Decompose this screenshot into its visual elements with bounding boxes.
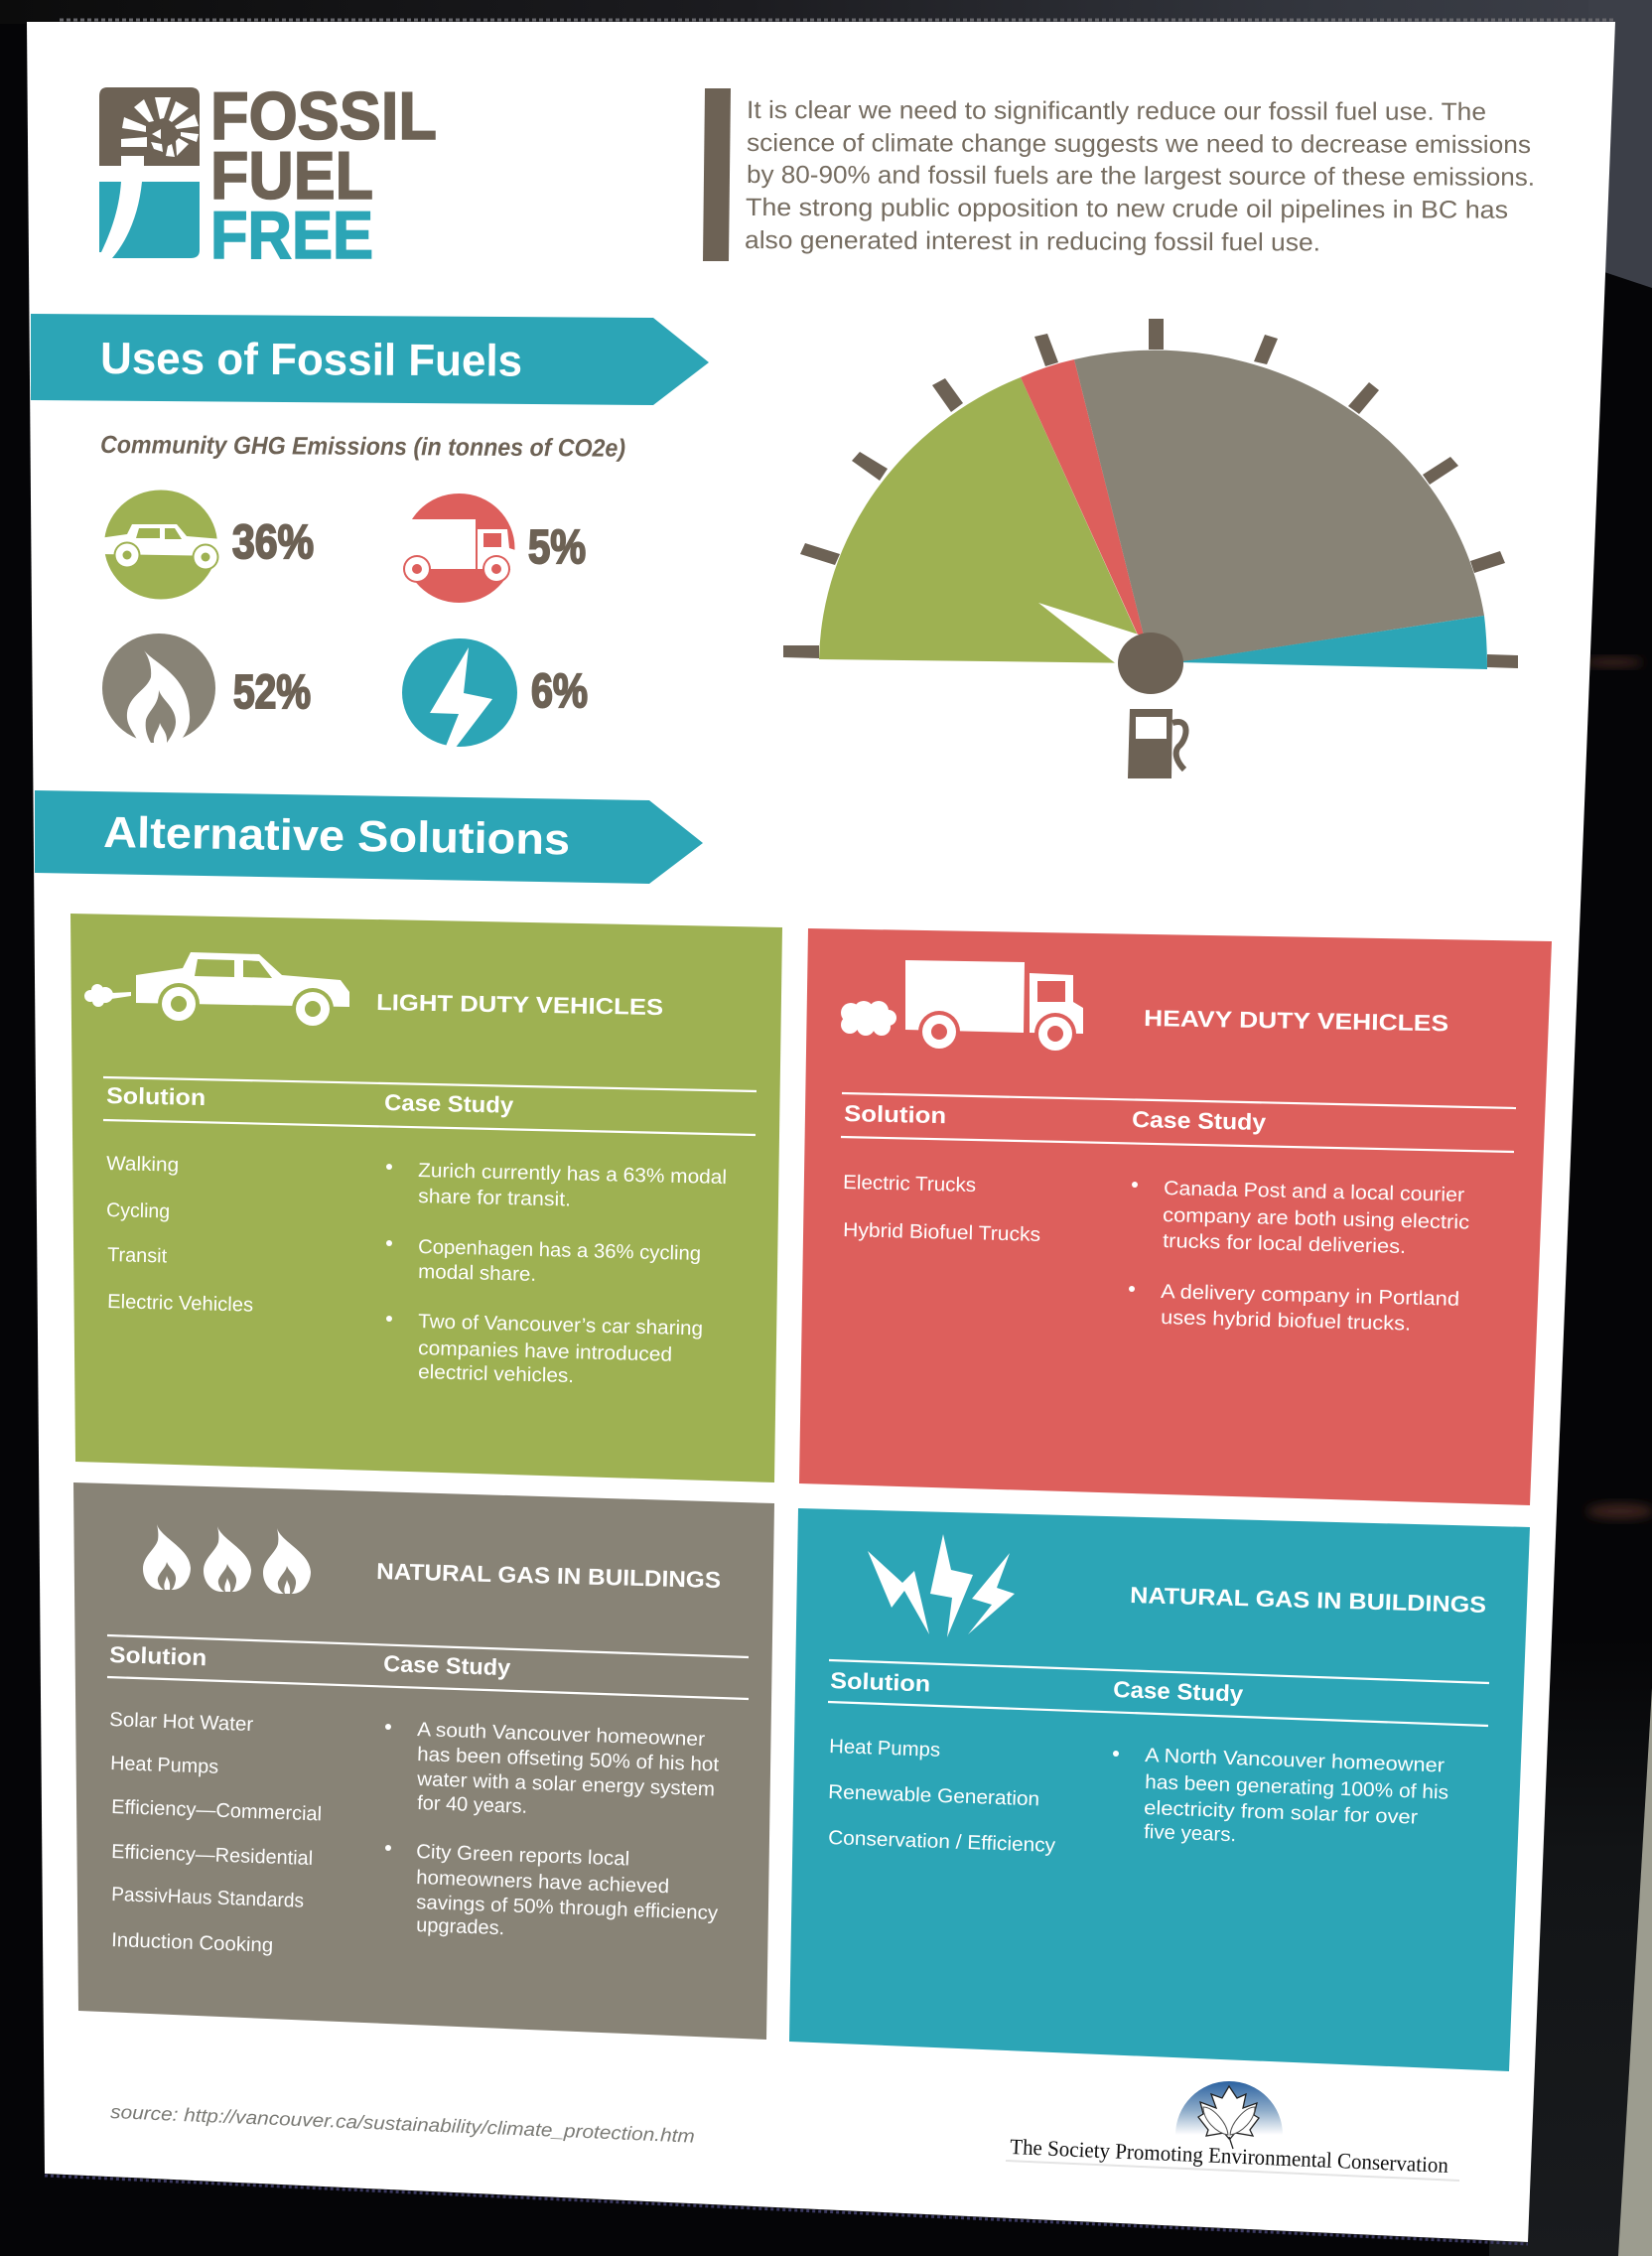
solutions list: Solar Hot Water [109, 1709, 254, 1736]
column head: Solution: Solution [106, 1082, 206, 1110]
value: 5%: 5% [528, 521, 586, 574]
panel background [73, 1482, 774, 2040]
solutions list: Renewable Generation [828, 1781, 1039, 1810]
case studies list [1113, 1745, 1448, 1846]
panel: light duty vehicles [70, 914, 782, 1482]
case studies list: electricl vehicles. [418, 1361, 574, 1387]
logo word: FOSSIL: FOSSIL [210, 78, 437, 154]
column head: Solution: Solution [830, 1667, 931, 1697]
icon: fuel pump [1128, 709, 1186, 778]
intro paragraph: also generated interest in reducing fossil fuel use. [745, 226, 1320, 257]
case studies list: A North Vancouver homeowner [1145, 1745, 1446, 1777]
gauge chart [783, 319, 1518, 778]
value: 6%: 6% [531, 665, 588, 718]
column head: Case Study: Case Study [1113, 1676, 1244, 1707]
gauge hub [1118, 633, 1183, 694]
case studies list: Copenhagen has a 36% cycling [418, 1236, 701, 1265]
solutions list: Hybrid Biofuel Trucks [843, 1219, 1040, 1246]
case studies list: for 40 years. [417, 1792, 528, 1818]
icon: three flames [143, 1524, 311, 1594]
icon: three lightning bolts [868, 1534, 1015, 1637]
case studies list: trucks for local deliveries. [1163, 1230, 1406, 1258]
banner: Alternative Solutions: Alternative Solutions [103, 808, 571, 864]
case studies list: City Green reports local [416, 1841, 629, 1871]
stat: light duty vehicles 36% [99, 491, 314, 600]
logo word: FREE: FREE [210, 198, 373, 273]
value: 36%: 36% [232, 516, 314, 569]
solutions list: Electric Trucks [843, 1172, 976, 1197]
logo: Society Promoting Environmental Conservation [1006, 2081, 1459, 2181]
chart subtitle: Community GHG Emissions (in tonnes of CO2e) [100, 431, 625, 463]
case studies list [386, 1160, 727, 1387]
case studies list: uses hybrid biofuel trucks. [1161, 1307, 1411, 1336]
panel: heavy duty vehicles [799, 928, 1552, 1505]
column head: Case Study: Case Study [1132, 1106, 1267, 1135]
logo icon: turbine and road [99, 87, 200, 258]
stat: heavy duty vehicles 5% [397, 494, 586, 603]
intro accent bar [703, 88, 731, 261]
intro paragraph: The strong public opposition to new crude oil pipelines in BC has [746, 194, 1508, 224]
solutions list [843, 1172, 1040, 1246]
solutions list: Heat Pumps [110, 1753, 219, 1778]
case studies list: modal share. [418, 1261, 536, 1286]
panel title: NATURAL GAS IN BUILDINGS [376, 1558, 721, 1593]
logo word: FUEL: FUEL [210, 138, 373, 213]
panel: electricity in buildings [789, 1508, 1530, 2071]
case studies list [385, 1719, 720, 1939]
solutions list: Conservation / Efficiency [828, 1827, 1055, 1857]
panel: natural gas in buildings [73, 1482, 774, 2040]
solutions list [106, 1153, 253, 1317]
case studies list: five years. [1144, 1821, 1237, 1846]
panel title: LIGHT DUTY VEHICLES [376, 989, 663, 1020]
solutions list: Heat Pumps [829, 1736, 941, 1762]
panel background [789, 1508, 1530, 2071]
solutions list [109, 1709, 322, 1957]
intro paragraph: It is clear we need to significantly reduce our fossil fuel use. The [747, 96, 1486, 126]
icon: truck with exhaust [841, 960, 1083, 1055]
case studies list: has been generating 100% of his [1145, 1771, 1448, 1804]
source note: source: http://vancouver.ca/sustainability/climate_protection.htm [110, 2102, 695, 2148]
solutions list: Induction Cooking [111, 1929, 273, 1957]
panel background [70, 914, 782, 1482]
solutions list: Electric Vehicles [107, 1291, 253, 1317]
solutions list: Efficiency—Commercial [111, 1796, 322, 1825]
solutions list: Walking [106, 1153, 179, 1177]
society name: The Society Promoting Environmental Conservation [1010, 2134, 1448, 2178]
intro paragraph [745, 96, 1535, 257]
case studies list: A delivery company in Portland [1161, 1281, 1459, 1311]
icon: car with exhaust [84, 952, 349, 1030]
case studies list: upgrades. [416, 1914, 505, 1939]
banner: Alternative Solutions [35, 790, 703, 884]
column head: Case Study: Case Study [384, 1089, 514, 1118]
intro paragraph: science of climate change suggests we need to decrease emissions [747, 129, 1531, 159]
case studies list: share for transit. [418, 1186, 571, 1210]
stat: natural gas 52% [102, 634, 311, 743]
case studies list: Zurich currently has a 63% modal [418, 1160, 727, 1189]
panel background [799, 928, 1552, 1505]
panel title: HEAVY DUTY VEHICLES [1144, 1005, 1448, 1036]
solutions list: PassivHaus Standards [111, 1884, 304, 1912]
icon: maple leaf on dome [1175, 2081, 1283, 2149]
case studies list: savings of 50% through efficiency [416, 1892, 718, 1924]
intro paragraph: by 80-90% and fossil fuels are the largest source of these emissions. [747, 161, 1535, 192]
gauge sector: electricity 6% [1176, 616, 1487, 669]
banner: Uses of Fossil Fuels: Uses of Fossil Fuels [100, 333, 522, 386]
solutions list: Efficiency—Residential [111, 1841, 313, 1870]
stat: electricity 6% [402, 638, 588, 749]
logo: Fossil Fuel Free [99, 78, 437, 273]
gauge sector: light duty 36% [819, 377, 1151, 663]
case studies list [1129, 1178, 1469, 1336]
value: 52%: 52% [233, 666, 311, 719]
solutions list [828, 1736, 1055, 1857]
case studies list: companies have introduced [418, 1338, 672, 1366]
panel title: NATURAL GAS IN BUILDINGS [1130, 1582, 1486, 1618]
icon: truck [397, 494, 518, 603]
case studies list: Two of Vancouver’s car sharing [418, 1311, 703, 1340]
solutions list: Cycling [106, 1199, 170, 1222]
icon: car [99, 491, 222, 600]
icon: flame [102, 634, 215, 743]
icon: lightning bolt [402, 638, 517, 749]
case studies list: Canada Post and a local courier [1164, 1178, 1465, 1206]
column head: Solution: Solution [844, 1100, 946, 1128]
case studies list: company are both using electric [1163, 1204, 1469, 1234]
column head: Solution: Solution [109, 1641, 207, 1670]
case studies list: electricity from solar for over [1144, 1797, 1419, 1829]
case studies list: has been offseting 50% of his hot [417, 1744, 720, 1776]
banner: Uses of Fossil Fuels [31, 314, 709, 405]
case studies list: A south Vancouver homeowner [417, 1719, 706, 1751]
solutions list: Transit [107, 1244, 168, 1267]
gauge sector: natural gas 52% [1074, 351, 1484, 663]
gauge needle [1038, 603, 1142, 665]
gauge ticks [783, 319, 1518, 668]
case studies list: homeowners have achieved [416, 1867, 669, 1898]
column head: Case Study: Case Study [383, 1650, 511, 1680]
case studies list: water with a solar energy system [416, 1768, 715, 1800]
gauge sector: heavy duty 5% [1021, 359, 1151, 663]
